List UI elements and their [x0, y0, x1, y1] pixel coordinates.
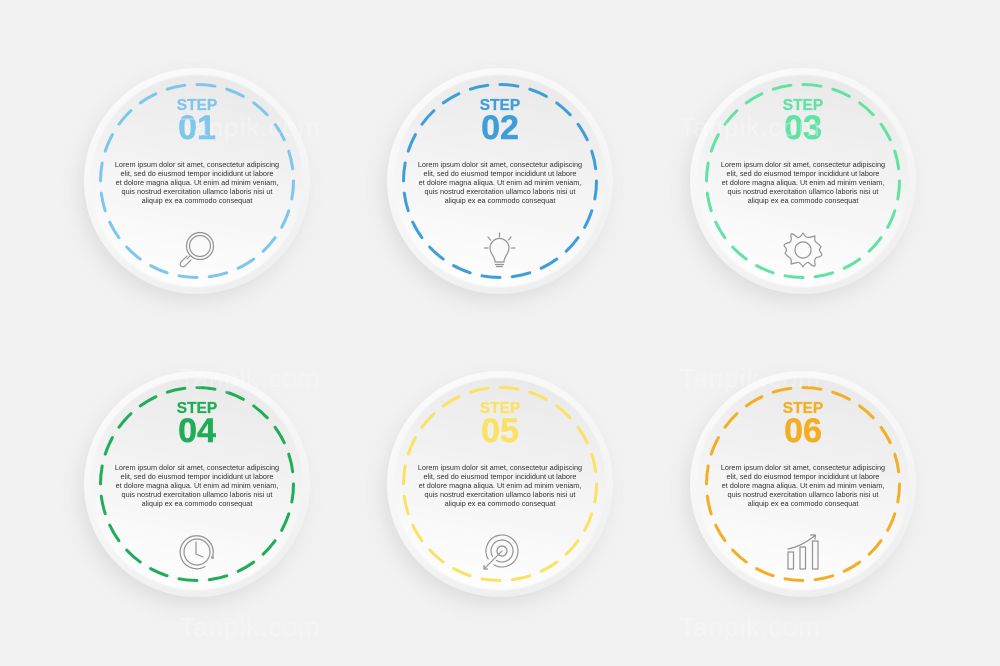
text block: step 02: Lorem ipsum dolor sit amet, consectetur adipiscing: [418, 160, 582, 169]
text block: step 02: et dolore magna aliqua. Ut enim ad minim veniam,: [419, 178, 581, 187]
dashed ring: step 02: [404, 84, 596, 278]
panel: step 04: [80, 371, 310, 605]
icon: light bulb: [484, 233, 515, 266]
dashed ring: step 05: [404, 388, 596, 580]
disc: step 06: [686, 371, 916, 605]
text block: step 06: Lorem ipsum dolor sit amet, consectetur adipiscing: [721, 463, 885, 472]
text block: step 03: Lorem ipsum dolor sit amet, consectetur adipiscing: [721, 160, 885, 169]
icon: magnifying glass: [180, 232, 214, 267]
number: 01: 01: [178, 109, 216, 147]
panel: step 05: [383, 371, 613, 605]
watermark: Tanpik.com: [179, 363, 321, 393]
disc: step 05: [383, 371, 613, 605]
dashed ring: step 03: [706, 84, 900, 278]
text block: step 01: Lorem ipsum dolor sit amet, consectetur adipiscing: [115, 160, 279, 169]
number: 04: 04: [178, 412, 216, 450]
text block: step 01: quis nostrud exercitation ullamco laboris nisi ut: [122, 187, 272, 196]
text block: step 04: quis nostrud exercitation ullamco laboris nisi ut: [122, 490, 272, 499]
text block: step 04: et dolore magna aliqua. Ut enim ad minim veniam,: [116, 481, 278, 490]
disc: step 04: [80, 371, 310, 605]
watermark: Tanpik.com: [179, 112, 321, 142]
icon: target: [484, 535, 518, 569]
text block: step 02: aliquip ex ea commodo consequat: [445, 196, 555, 205]
text block: step 06: et dolore magna aliqua. Ut enim ad minim veniam,: [722, 481, 884, 490]
text block: step 03: et dolore magna aliqua. Ut enim ad minim veniam,: [722, 178, 884, 187]
heading: step 03: STEP: [783, 97, 823, 114]
watermark: Tanpik.com: [179, 612, 321, 642]
watermark: [179, 112, 821, 642]
dashed ring: step 06: [706, 388, 900, 580]
text block: step 05: Lorem ipsum dolor sit amet, consectetur adipiscing: [418, 463, 582, 472]
watermark: Tanpik.com: [679, 612, 821, 642]
number: 03: 03: [784, 109, 822, 147]
text block: step 06: aliquip ex ea commodo consequat: [748, 499, 858, 508]
heading: step 01: STEP: [177, 97, 217, 114]
text block: step 01: aliquip ex ea commodo consequat: [142, 196, 252, 205]
text block: step 02: quis nostrud exercitation ullamco laboris nisi ut: [425, 187, 575, 196]
heading: step 05: STEP: [480, 400, 520, 417]
number: 06: 06: [784, 412, 822, 450]
panel: step 06: [686, 371, 916, 605]
number: 02: 02: [481, 109, 519, 147]
heading: step 04: STEP: [177, 400, 217, 417]
text block: step 04: aliquip ex ea commodo consequat: [142, 499, 252, 508]
heading: step 06: STEP: [783, 400, 823, 417]
watermark: Tanpik.com: [679, 363, 821, 393]
dashed ring: step 01: [100, 84, 294, 278]
text block: step 01: elit, sed do eiusmod tempor incididunt ut labore: [121, 169, 273, 178]
text block: step 06: quis nostrud exercitation ullamco laboris nisi ut: [728, 490, 878, 499]
panel: step 02: [383, 68, 613, 302]
text block: step 05: elit, sed do eiusmod tempor incididunt ut labore: [424, 472, 576, 481]
panel: step 03: [686, 68, 916, 302]
text block: step 06: elit, sed do eiusmod tempor incididunt ut labore: [727, 472, 879, 481]
icon: gear: [784, 233, 822, 267]
text block: step 03: quis nostrud exercitation ullamco laboris nisi ut: [728, 187, 878, 196]
icon: clock: [180, 536, 213, 569]
text block: step 05: et dolore magna aliqua. Ut enim ad minim veniam,: [419, 481, 581, 490]
text block: step 05: quis nostrud exercitation ullamco laboris nisi ut: [425, 490, 575, 499]
heading: step 02: STEP: [480, 97, 520, 114]
text block: step 03: elit, sed do eiusmod tempor incididunt ut labore: [727, 169, 879, 178]
text block: step 03: aliquip ex ea commodo consequat: [748, 196, 858, 205]
dashed ring: step 04: [100, 388, 294, 580]
text block: step 02: elit, sed do eiusmod tempor incididunt ut labore: [424, 169, 576, 178]
number: 05: 05: [481, 412, 519, 450]
disc: step 01: [80, 68, 310, 302]
watermark: Tanpik.com: [679, 112, 821, 142]
disc: step 03: [686, 68, 916, 302]
panel: step 01: [80, 68, 310, 302]
text block: step 05: aliquip ex ea commodo consequat: [445, 499, 555, 508]
text block: step 04: Lorem ipsum dolor sit amet, consectetur adipiscing: [115, 463, 279, 472]
text block: step 04: elit, sed do eiusmod tempor incididunt ut labore: [121, 472, 273, 481]
text block: step 01: et dolore magna aliqua. Ut enim ad minim veniam,: [116, 178, 278, 187]
icon: bar chart: [788, 535, 818, 569]
disc: step 02: [383, 68, 613, 302]
